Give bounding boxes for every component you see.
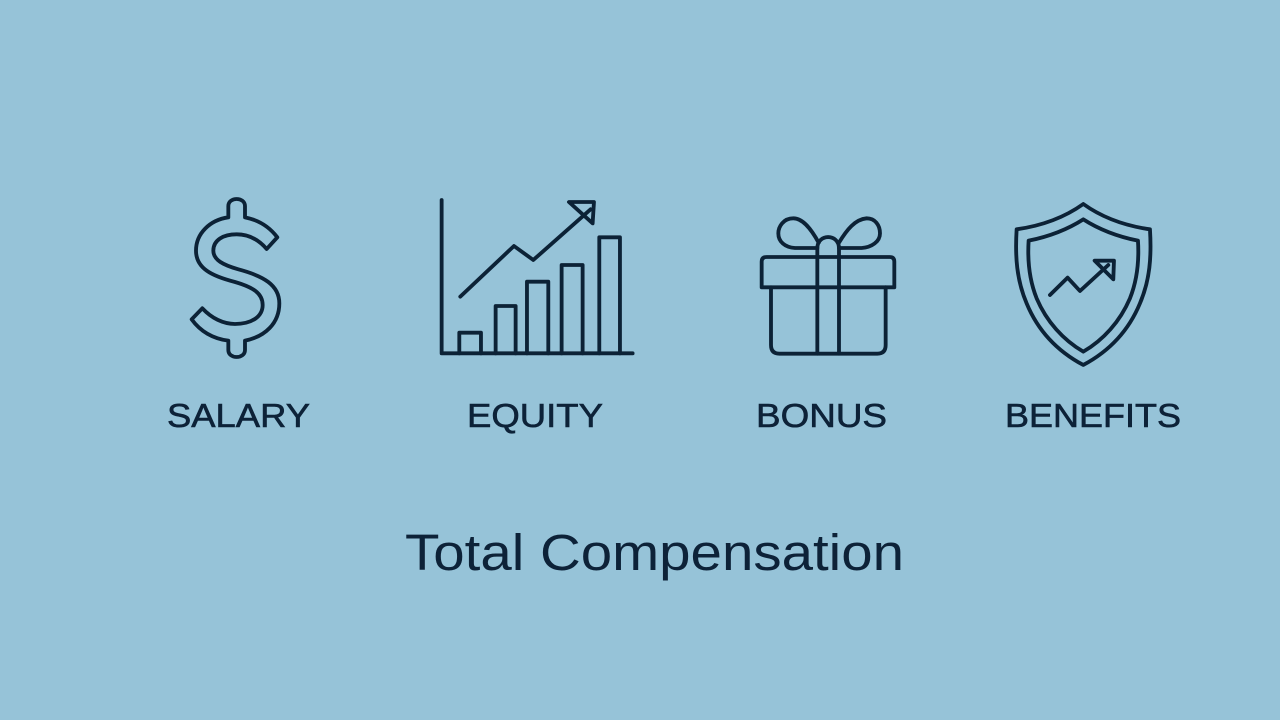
gift base	[771, 287, 886, 354]
bow	[778, 218, 880, 248]
label: salary: SALARY	[167, 397, 310, 434]
chart bars	[459, 237, 620, 353]
label: bonus: BONUS	[756, 397, 887, 434]
title: Total Compensation	[405, 524, 904, 581]
small trend arrow	[1050, 261, 1114, 295]
icon: dollar sign	[192, 199, 279, 357]
ribbon	[817, 237, 839, 354]
icon: equity growth chart	[442, 200, 633, 353]
icon: shield with rising chart	[1016, 204, 1151, 365]
chart axes	[442, 200, 633, 353]
growth arrow	[460, 202, 594, 297]
icon: gift box	[762, 218, 894, 354]
label: equity: EQUITY	[467, 397, 603, 434]
shield outer outline	[1016, 204, 1151, 365]
label: benefits: BENEFITS	[1005, 397, 1181, 434]
gift lid	[762, 257, 894, 287]
shield inner outline	[1028, 219, 1138, 352]
